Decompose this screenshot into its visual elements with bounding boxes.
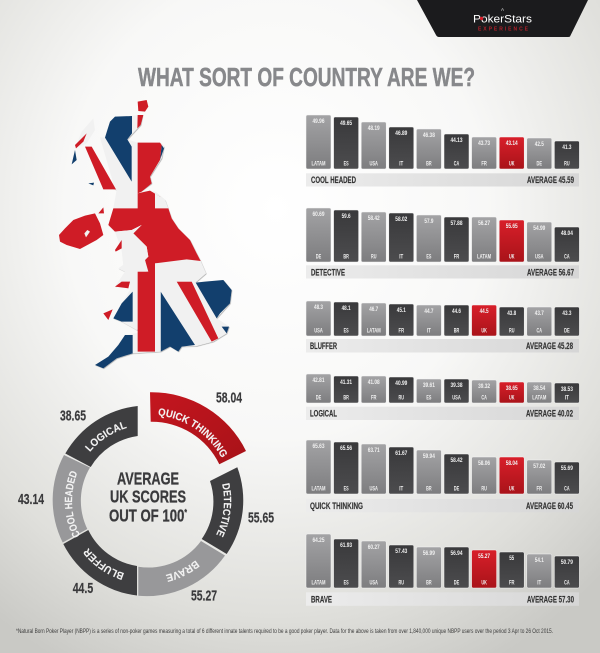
bars: CA (537, 328, 542, 334)
bars: IT (399, 162, 404, 168)
bars: FR (481, 162, 487, 168)
segment: quick thinking: QUICK THINKING (158, 408, 227, 458)
bars: BR (426, 162, 432, 168)
Scottish islands (98, 207, 122, 252)
bars: DE (316, 396, 321, 402)
bars: USA (314, 328, 323, 334)
bars: 54.99 (533, 226, 546, 232)
bars: 57.88 (450, 221, 463, 227)
bars: ES (426, 254, 431, 260)
ring centre text (109, 468, 187, 526)
bars: CA (454, 162, 460, 168)
bars: RU (371, 254, 376, 260)
title: WHAT SORT OF COUNTRY ARE WE? (138, 62, 475, 92)
label strip (306, 265, 579, 278)
bars: DE (454, 580, 459, 586)
label strip: QUICK THINKING (310, 501, 363, 511)
chart: cool headed (306, 115, 579, 186)
bars: USA (369, 162, 378, 168)
bars: LATAM (477, 254, 491, 260)
segment: quick thinking (150, 392, 246, 464)
label strip: BRAVE (311, 595, 332, 605)
bars: FR (509, 580, 515, 586)
bars: 38.53 (561, 387, 573, 393)
bars: 50.79 (561, 560, 573, 566)
bars: 65.56 (340, 446, 353, 452)
bars: 38.65 (506, 386, 518, 392)
bars (306, 115, 579, 169)
bars: 56.99 (423, 551, 435, 557)
label strip: COOL HEADED (311, 175, 356, 185)
bars: 58.06 (478, 461, 491, 467)
bars: USA (535, 254, 544, 260)
bars: 44.7 (424, 309, 434, 315)
ring score values: 55.65 (248, 510, 274, 527)
bars: ES (344, 580, 349, 586)
bars: 43.73 (478, 141, 491, 147)
Outer Hebrides (72, 118, 95, 185)
segment: brave (138, 541, 225, 596)
logo: PokerStars Experience (417, 0, 588, 37)
bars: USA (452, 396, 461, 402)
bars: ES (344, 486, 349, 492)
bars: 55.65 (506, 224, 518, 230)
label strip: AVERAGE 57.30 (527, 595, 574, 605)
bars: 39.38 (450, 383, 463, 389)
bars: 55.27 (478, 554, 491, 560)
bars: 41.3 (562, 145, 572, 151)
bars: 58.04 (506, 461, 518, 467)
bars: 41.31 (340, 380, 353, 386)
bars: UK (509, 162, 515, 168)
bars: LATAM (312, 162, 326, 168)
ring centre text: OUT OF 100 (109, 506, 209, 526)
bars: 60.27 (368, 545, 380, 551)
bars: USA (369, 486, 378, 492)
bars: IT (399, 486, 404, 492)
bars: DE (454, 486, 459, 492)
bars: 40.99 (395, 381, 408, 387)
ring centre text: UK SCORES (110, 487, 186, 507)
bars: RU (481, 486, 487, 492)
bars: RU (399, 580, 404, 586)
bars: LATAM (312, 486, 326, 492)
label strip (306, 592, 579, 606)
bars: 57.9 (424, 219, 434, 225)
bars: 46.38 (423, 133, 435, 139)
Ireland (59, 213, 103, 249)
logo: PokerStars Experience: A (501, 7, 504, 12)
logo: PokerStars Experience: EXPERIENCE (478, 26, 529, 32)
bars: DE (537, 162, 542, 168)
bars: 57.43 (395, 549, 408, 555)
bars (306, 440, 579, 494)
bars: CA (564, 254, 570, 260)
label strip: AVERAGE 60.45 (526, 501, 573, 511)
bars: BR (343, 254, 349, 260)
bars (306, 301, 579, 336)
bars: 60.69 (312, 212, 325, 218)
bars: 49.96 (312, 119, 325, 125)
bars: 43.3 (562, 311, 572, 317)
label strip (306, 499, 579, 512)
bars: 38.54 (533, 386, 546, 392)
bars: IT (565, 396, 569, 402)
map: UK filled with union flag (59, 100, 232, 368)
bars: 42.5 (535, 142, 544, 148)
bars: 54.1 (535, 558, 544, 564)
flag: red cross and diagonals (85, 100, 218, 352)
segment: bluffer: BLUFFER (84, 548, 124, 580)
bars: 42.81 (312, 378, 325, 384)
chart: logical (306, 374, 579, 420)
segment: logical: LOGICAL (84, 422, 127, 452)
bars: 55.69 (561, 466, 573, 472)
bars: RU (509, 328, 514, 334)
bars: 46.89 (395, 131, 408, 137)
label strip: AVERAGE 45.28 (526, 341, 573, 351)
bars: 56.94 (450, 551, 463, 557)
bars: 44.5 (480, 309, 489, 315)
segment: detective (202, 467, 244, 554)
bars: 43.7 (535, 311, 544, 317)
bars: 57.02 (533, 464, 546, 470)
bars: 41.08 (368, 380, 380, 386)
bars: DE (564, 328, 570, 334)
ring score values: 58.04 (216, 390, 242, 407)
chart: bluffer (306, 301, 579, 352)
bars: LATAM (367, 328, 381, 334)
label strip: BLUFFER (310, 341, 337, 351)
bars: 44.6 (452, 309, 462, 315)
bars: UK (509, 396, 515, 402)
label strip (306, 339, 579, 352)
bars: RU (564, 162, 570, 168)
bars: 45.1 (397, 308, 406, 314)
bars: IT (399, 254, 404, 260)
bars: 48.3 (314, 305, 324, 311)
bars: 56.27 (478, 221, 491, 227)
bars: 48.19 (368, 126, 380, 132)
ring centre text: AVERAGE (117, 468, 179, 488)
label strip (306, 407, 579, 420)
bars: LATAM (532, 396, 546, 402)
ring score values: 43.14 (18, 491, 44, 508)
bars: 44.13 (450, 138, 463, 144)
segment: brave: BRAVE (166, 560, 200, 582)
bars: 64.25 (312, 538, 325, 544)
label strip: AVERAGE 40.02 (526, 409, 573, 419)
bars: FR (454, 254, 460, 260)
bars: ES (344, 162, 349, 168)
bars: FR (537, 486, 543, 492)
bars: BR (426, 580, 432, 586)
chart: detective (306, 208, 579, 278)
chart: brave (306, 534, 579, 606)
bars: FR (371, 396, 377, 402)
bars: IT (537, 580, 542, 586)
bars: 43.8 (507, 311, 517, 317)
segment: logical (65, 406, 138, 467)
ring score values: 55.27 (191, 588, 217, 605)
bars (306, 208, 579, 262)
ring score values: 38.65 (60, 408, 86, 425)
bars: 49.65 (340, 121, 353, 127)
bars: 39.61 (423, 383, 435, 389)
label strip: AVERAGE 56.67 (527, 267, 574, 277)
bars (306, 534, 579, 588)
bars: DE (316, 254, 321, 260)
bars: UK (509, 254, 515, 260)
bars: 58.02 (395, 217, 408, 223)
bars: UK (509, 486, 515, 492)
bars: CA (564, 486, 570, 492)
bars: 63.71 (368, 448, 380, 454)
bars: 58.42 (368, 216, 380, 222)
bars: LATAM (312, 580, 326, 586)
bars: BR (343, 396, 349, 402)
ring score values (18, 390, 274, 605)
ring chart: average UK scores (52, 392, 246, 596)
segment: detective: DETECTIVE (216, 483, 232, 538)
map outline (95, 115, 232, 368)
bars: 55 (509, 556, 515, 562)
bars: FR (399, 328, 405, 334)
label strip (306, 173, 579, 186)
bars: RU (399, 396, 404, 402)
bars: UK (481, 328, 487, 334)
bars: ES (426, 396, 431, 402)
bars: 48.04 (561, 231, 573, 237)
logo: PokerStars Experience: PokerStars (473, 14, 533, 26)
bars: 59.6 (342, 214, 351, 220)
bars: 39.32 (478, 384, 491, 390)
bars: 59.94 (423, 454, 435, 460)
flag: white cutouts (115, 193, 206, 352)
bars: ES (344, 328, 349, 334)
bars: 61.93 (340, 543, 353, 549)
bars: BR (454, 328, 460, 334)
bars: CA (564, 580, 570, 586)
bars: USA (369, 580, 378, 586)
chart: quick thinking (306, 440, 579, 512)
bars (306, 374, 579, 403)
bars: 48.1 (342, 306, 351, 312)
bars: 65.63 (312, 444, 325, 450)
bars: UK (481, 580, 487, 586)
ring centre text: * (184, 508, 187, 518)
bars: IT (427, 328, 431, 334)
label strip: LOGICAL (310, 409, 337, 419)
label strip: DETECTIVE (311, 267, 345, 277)
bars: 61.67 (395, 451, 408, 457)
segment: cool headed (52, 455, 90, 542)
bars: 58.42 (450, 458, 463, 464)
segment: cool headed: COOL HEADED (64, 471, 80, 538)
bars: CA (481, 396, 487, 402)
bars: 46.7 (369, 307, 379, 313)
segment: bluffer (63, 530, 137, 596)
ring score values: 44.5 (73, 580, 93, 597)
bars: BR (426, 486, 432, 492)
bars: 43.14 (506, 141, 518, 147)
label strip: AVERAGE 45.59 (527, 175, 574, 185)
flag: navy panels (95, 116, 232, 368)
